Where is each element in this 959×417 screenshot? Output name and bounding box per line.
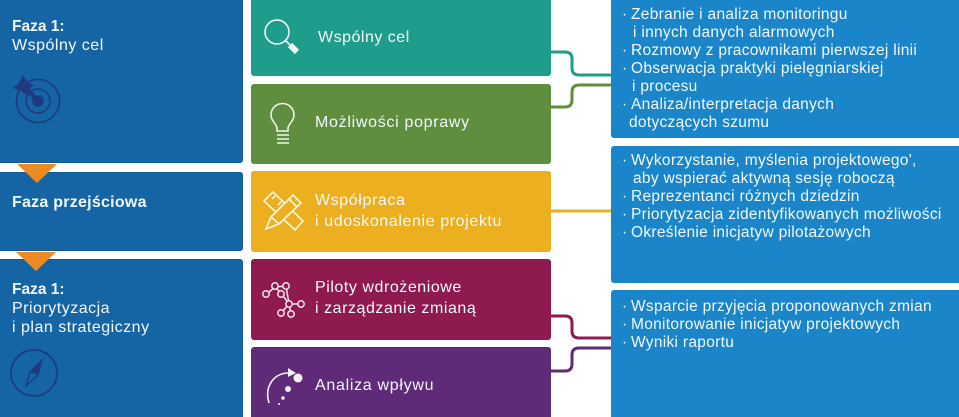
- text block: details 2: Wykorzystanie, myślenia projektowego',: [631, 152, 917, 169]
- text block: details 2: Priorytyzacja zidentyfikowanych możliwości: [631, 206, 942, 223]
- panel: Analiza wpływu: [251, 347, 551, 417]
- heading: Faza 1 Priorytyzacja i plan strategiczny: Priorytyzacja: [12, 300, 110, 317]
- text block: details 1: ·: [622, 96, 627, 113]
- text block: details 3: Wyniki raportu: [631, 334, 734, 351]
- text block: details 2: ·: [622, 188, 627, 205]
- text block: details 3: Monitorowanie inicjatyw projektowych: [631, 316, 900, 333]
- label: Piloty wdrożeniowe i zarządzanie zmianą: i zarządzanie zmianą: [315, 300, 476, 317]
- arrow: phase 1 to transition: [17, 164, 57, 183]
- text block: details 1: Obserwacja praktyki pielęgniarskiej: [631, 60, 884, 77]
- text block: details 1: ·: [622, 42, 627, 59]
- text block: details 1: ·: [622, 6, 627, 23]
- text block: details 2: Reprezentanci różnych dziedzin: [631, 188, 860, 205]
- panel: right details 3: [611, 290, 959, 417]
- text block: details 1: dotyczących szumu: [629, 114, 769, 131]
- label: Piloty wdrożeniowe i zarządzanie zmianą: Piloty wdrożeniowe: [315, 279, 462, 296]
- heading: Faza 1 Priorytyzacja i plan strategiczny: [12, 281, 150, 336]
- panel: Wspólny cel: [251, 0, 551, 76]
- text block: details 3: Wsparcie przyjęcia proponowanych zmian: [631, 298, 932, 315]
- label: Współpraca i udoskonalenie projektu: Współpraca: [315, 192, 405, 209]
- panel: Możliwości poprawy: [251, 84, 551, 164]
- icon: network: [262, 282, 305, 318]
- icon: light bulb: [270, 102, 295, 144]
- panel: Faza przejściowa: [0, 172, 243, 251]
- text block: details 1: Zebranie i analiza monitoringu: [631, 6, 848, 23]
- label: Współpraca i udoskonalenie projektu: i udoskonalenie projektu: [315, 213, 502, 230]
- text block: details 1: ·: [622, 60, 627, 77]
- text block: details 3: ·: [622, 334, 627, 351]
- text block: details 2: aby wspierać aktywną sesję roboczą: [633, 170, 895, 187]
- heading: Faza przejściowa: Faza przejściowa: [12, 194, 147, 211]
- panel: Faza 1 Priorytyzacja: [0, 259, 243, 417]
- text block: details 1: i innych danych alarmowych: [633, 24, 835, 41]
- text block: details 2: [622, 152, 942, 241]
- label: Analiza wpływu: Analiza wpływu: [315, 377, 434, 394]
- icon: magnifier: [264, 19, 300, 54]
- label: Wspólny cel: Wspólny cel: [318, 29, 410, 46]
- heading: Faza 1 Wspólny cel: Faza 1:: [12, 18, 65, 35]
- panel: Piloty wdrożeniowe i zarządzanie zmianą: [251, 259, 551, 340]
- label: Współpraca i udoskonalenie projektu: [315, 192, 502, 230]
- panel: Faza 1 Wspólny cel: [0, 0, 243, 163]
- icon: trajectory: [266, 368, 302, 405]
- text block: details 3: ·: [622, 298, 627, 315]
- label: Możliwości poprawy: Możliwości poprawy: [315, 114, 470, 131]
- label: Piloty wdrożeniowe i zarządzanie zmianą: [315, 279, 476, 317]
- panel: right details 1: [611, 0, 959, 138]
- text block: details 2: ·: [622, 206, 627, 223]
- text block: details 1: Rozmowy z pracownikami pierwszej linii: [631, 42, 917, 59]
- text block: details 3: [622, 298, 932, 351]
- heading: Faza 1 Wspólny cel: Wspólny cel: [12, 37, 104, 54]
- text block: details 2: Określenie inicjatyw pilotażowych: [631, 224, 871, 241]
- text block: details 1: i procesu: [632, 78, 698, 95]
- text block: details 3: ·: [622, 316, 627, 333]
- icon: target: [13, 75, 60, 124]
- icon: ruler and pencil: [262, 191, 304, 232]
- heading: Faza 1 Priorytyzacja i plan strategiczny: i plan strategiczny: [12, 319, 150, 336]
- heading: Faza 1 Wspólny cel: [12, 18, 104, 54]
- text block: details 1: Analiza/interpretacja danych: [631, 96, 834, 113]
- arrow: transition to phase 1: [16, 252, 56, 271]
- text block: details 2: ·: [622, 152, 627, 169]
- panel: Współpraca i udoskonalenie projektu: [251, 171, 551, 252]
- text block: details 2: ·: [622, 224, 627, 241]
- icon: compass: [10, 349, 58, 397]
- text block: details 1: [622, 6, 917, 131]
- panel: right details 2: [611, 146, 959, 283]
- heading: Faza 1 Priorytyzacja i plan strategiczny: Faza 1:: [12, 281, 65, 298]
